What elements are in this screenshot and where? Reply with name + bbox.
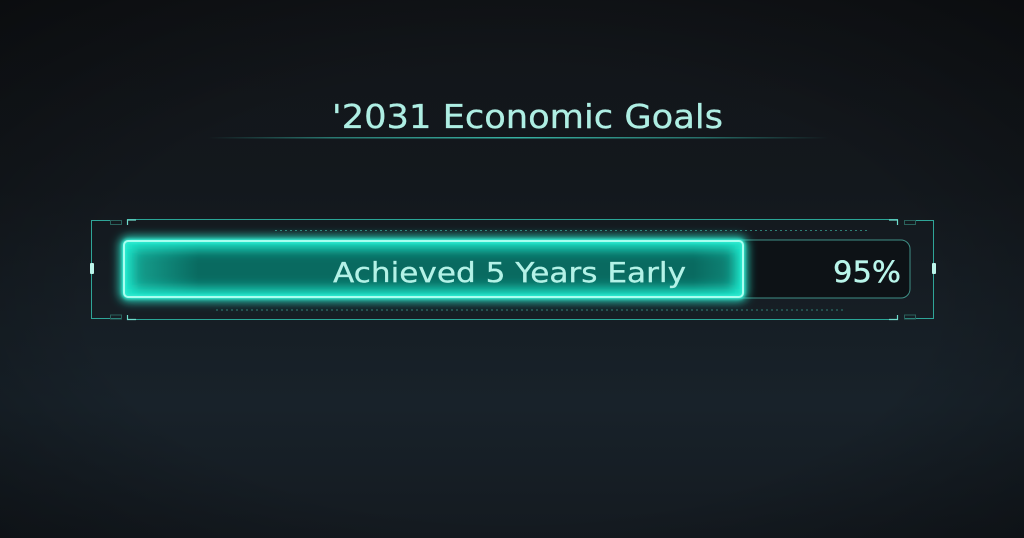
percent value: 95%: [833, 255, 901, 289]
side tick: right: [932, 263, 936, 274]
progress fill: [124, 241, 743, 297]
title: '2031 Economic Goals: [332, 98, 723, 136]
bottom dotted line: [216, 309, 845, 311]
top rail: [128, 220, 898, 225]
corner highlights: [128, 220, 898, 320]
right bracket: [904, 220, 934, 318]
bottom rail: [128, 315, 898, 320]
top dotted line: [275, 230, 870, 232]
HUD frame: [92, 220, 934, 320]
title underline: [208, 137, 828, 138]
progress track: [123, 240, 910, 298]
left bracket: [92, 220, 122, 318]
side tick: left: [90, 263, 94, 274]
corner tabs: [110, 220, 916, 319]
progress label: Achieved 5 Years Early: [333, 257, 686, 289]
